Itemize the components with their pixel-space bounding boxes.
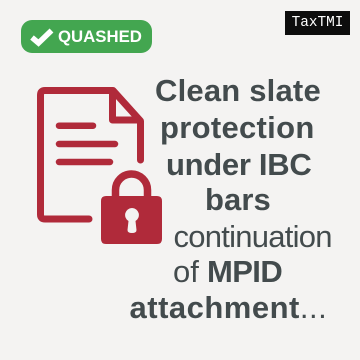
headline line 6: [173, 254, 282, 289]
headline line 4: bars: [205, 182, 271, 217]
headline line 7: attachment...: [130, 290, 327, 325]
document fold: [112, 91, 140, 120]
padlock shackle: [116, 174, 148, 200]
badge: quashed: [21, 20, 152, 53]
padlock body: [101, 196, 162, 244]
document text lines: [59, 126, 115, 162]
badge label: QUASHED: [58, 27, 142, 46]
headline line 2: protection: [160, 110, 315, 145]
logo: TaxTMI: TaxTMI: [292, 15, 343, 31]
headline line 6: of: [173, 254, 199, 289]
headline line 1: Clean slate: [155, 73, 321, 108]
logo: TaxTMI: [285, 11, 350, 35]
document outline: [40, 90, 140, 219]
headline: [130, 73, 332, 325]
icon: check mark: [30, 28, 54, 47]
headline line 3: under IBC: [166, 147, 311, 182]
headline line 5: continuation: [174, 219, 332, 254]
headline line 6: MPID: [207, 254, 282, 289]
